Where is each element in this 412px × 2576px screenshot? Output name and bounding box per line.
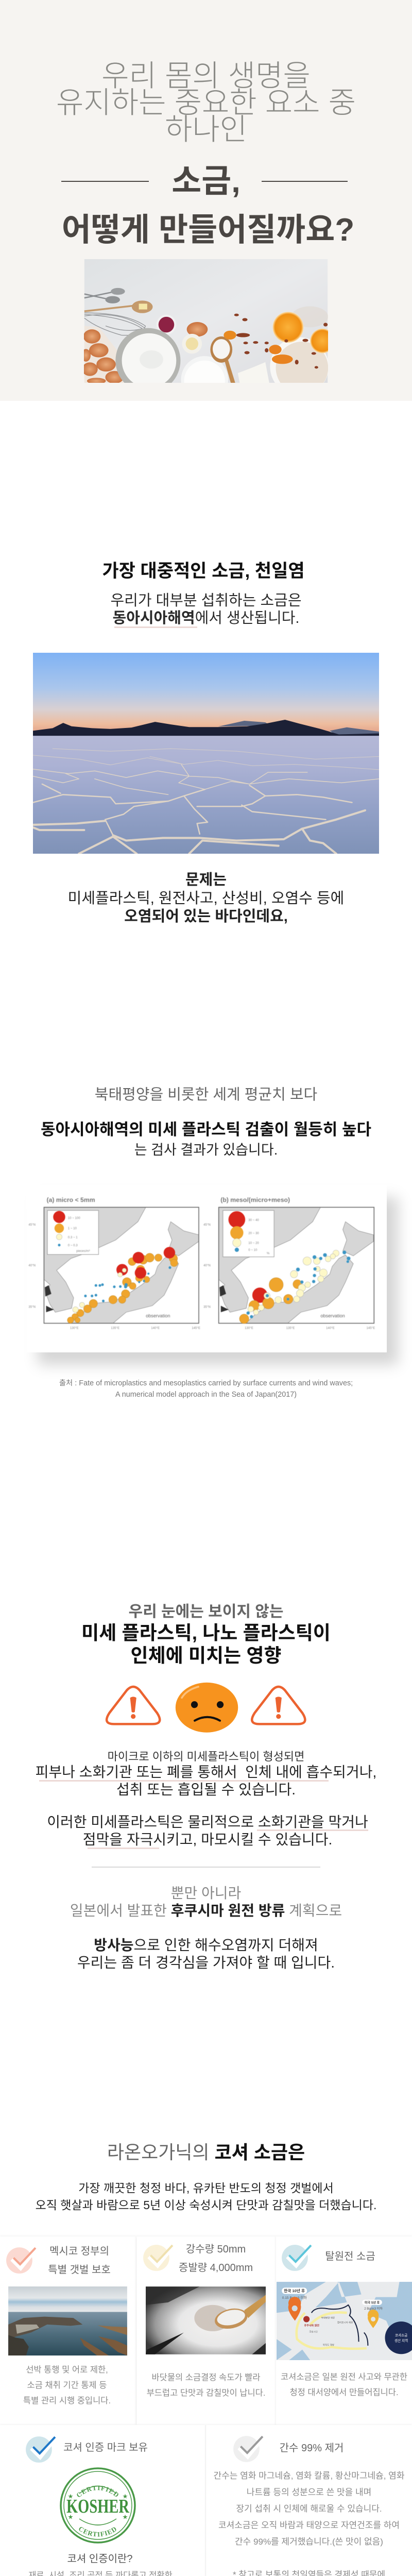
text: radioactivity: 방사능으로 인한 해수오염까지 더해져 우리는 좀 더 경각심을 가져야 할 때 입니다. [77, 1937, 335, 1971]
text: above world average: 북태평양을 비롯한 세계 평균치 보다 [95, 1087, 317, 1103]
map a: 0.3 ~ 1 [68, 1235, 78, 1239]
map b: 0 ~ 10 [248, 1248, 258, 1252]
map: ocean current: 0.15 Bq/m3 이하 [282, 2295, 307, 2300]
photo: baking ingredients [84, 259, 328, 383]
map: ocean current: 2 Bq/m3 이하 [364, 2307, 383, 2311]
map b: 35°N [203, 1305, 211, 1309]
icon: check yellow [143, 2244, 173, 2271]
photo: salt flat at dusk [33, 653, 379, 854]
map b: 135°E [286, 1327, 295, 1330]
map a: (a) micro < 5mm [47, 1196, 95, 1204]
map b: 45°N [203, 1223, 211, 1227]
map a: 130°E [70, 1327, 79, 1330]
map a: 1 ~ 10 [68, 1227, 77, 1230]
map a: 145°E [192, 1327, 200, 1330]
map: ocean current: 미국 5년 후 [365, 2300, 380, 2304]
text: invisible to the eye: 우리 눈에는 보이지 않는 [128, 1603, 283, 1620]
heading: kosher salt: 라온오가닉의 코셔 소금은 [107, 2142, 305, 2163]
stamp: kosher certified: ★ [68, 2494, 73, 2500]
map: ocean current: 코셔소금 [395, 2333, 407, 2337]
title divider left [61, 181, 149, 182]
map a: observation [146, 1313, 170, 1318]
stamp: kosher certified: ★ [123, 2515, 128, 2520]
heading: effects on the human body: 미세 플라스틱, 나노 플라스틱이 인체에 미치는 영향 [81, 1622, 331, 1666]
map a: pieces/m³ [76, 1249, 90, 1253]
card heading: 멕시코 정부의 특별 갯벌 보호 [48, 2246, 111, 2276]
card heading: 탈원전 소금 [325, 2251, 375, 2262]
icon: warning triangle right [252, 1687, 305, 1724]
text: physical blockage: 이러한 미세플라스틱은 물리적으로 소화기관을 막거나 점막을 자극시키고, 마모시킬 수 있습니다. [47, 1814, 368, 1848]
map b: observation [320, 1313, 345, 1318]
panel: card kosher mark [0, 2425, 205, 2576]
map a [28, 1196, 200, 1330]
map: ocean current: 캘리포니아 해류 [337, 2321, 353, 2325]
panel: card rainfall evaporation [136, 2236, 276, 2425]
map a: 35°N [28, 1305, 36, 1309]
text: micro plastics intro: 마이크로 이하의 미세플라스틱이 형성되면 [108, 1750, 304, 1763]
map a: 135°E [111, 1327, 119, 1330]
source note: 출처 : Fate of microplastics and mesoplastics carried by surface currents and wind waves; A numerical model approach in the Sea of Japan(2017) [59, 1379, 353, 1399]
title: salt: 소금, [171, 163, 241, 199]
icons: warnings and sad face [105, 1683, 306, 1733]
map b [203, 1196, 375, 1330]
panel: card no nuclear [276, 2236, 412, 2425]
map b: 145°E [366, 1327, 375, 1330]
photo: rocky sea [8, 2286, 127, 2355]
map: ocean current: 후쿠시마 원전 [304, 2324, 319, 2328]
card text: 바닷물의 소금결정 속도가 빨라 부드럽고 단맛과 감칠맛이 납니다. [147, 2373, 265, 2398]
icon: check grey [233, 2436, 264, 2462]
map b: 10 ~ 20 [248, 1242, 259, 1245]
map a: 140°E [151, 1327, 160, 1330]
map b: % [267, 1251, 270, 1255]
icon: check blue [26, 2436, 56, 2463]
subheading: what is kosher: 코셔 인증이란? [67, 2553, 133, 2565]
map: ocean current: 북적도 해류 [323, 2343, 334, 2347]
map a: 0 ~ 0.3 [68, 1244, 78, 1247]
map: ocean current: 생산 지역 [394, 2338, 408, 2343]
map b: 20 ~ 30 [248, 1231, 259, 1235]
title: intro lines: 우리 몸의 생명을 유지하는 중요한 요소 중 하나인 [56, 59, 356, 146]
stamp: kosher certified: CERTIFIED [77, 2485, 118, 2497]
text: east asia sea: 우리가 대부분 섭취하는 소금은 동아시아해역에서 생산됩니다. [110, 592, 302, 626]
text: test result: 는 검사 결과가 있습니다. [134, 1142, 278, 1158]
map b: 130°E [245, 1327, 253, 1330]
text: kosher salt description: 가장 깨끗한 청정 바다, 유카탄 반도의 청정 갯벌에서 오직 햇살과 바람으로 5년 이상 숙성시켜 단맛과 감칠맛을 더했습니다. [36, 2181, 376, 2212]
panel: card mexico tidal flat [0, 2236, 136, 2425]
map: ocean current: 북태평양 해류 [321, 2316, 335, 2319]
map: ocean current: 한국 10년 후 [284, 2288, 305, 2293]
stamp: kosher certified: ★ [68, 2515, 73, 2520]
map a: 40°N [28, 1264, 36, 1267]
card heading: 코셔 인증 마크 보유 [63, 2442, 148, 2453]
map b: 140°E [326, 1327, 335, 1330]
photo: salt and wooden spoon [146, 2286, 266, 2354]
panel: card bittern removal [206, 2425, 412, 2576]
card heading: 간수 99% 제거 [280, 2443, 344, 2454]
card heading: 강수량 50mm 증발량 4,000mm [179, 2244, 253, 2274]
title divider right [262, 181, 348, 182]
map: ocean current [277, 2282, 412, 2360]
map b: 40°N [203, 1264, 211, 1267]
stamp: kosher certified: ★ [123, 2494, 128, 2500]
icon: check salmon [6, 2247, 36, 2274]
stamp: kosher certified: CERTIFIED [79, 2527, 116, 2537]
text: fukushima: 뿐만 아니라 일본에서 발표한 후쿠시마 원전 방류 계획으로 [70, 1885, 342, 1919]
chart: microplastic maps [26, 1185, 387, 1352]
icon: sad face [176, 1683, 238, 1733]
map b: (b) meso/(micro+meso) [220, 1196, 290, 1204]
map: ocean current: 쿠로시오 [309, 2330, 318, 2333]
text: absorption: 피부나 소화기관 또는 폐를 통해서 인체 내에 흡수되거나, 섭취 또는 흡입될 수 있습니다. [36, 1764, 376, 1798]
card text: 코셔소금은 일본 원전 사고와 무관한 청정 대서양에서 만들어집니다. [281, 2372, 407, 2397]
title: how is it made: 어떻게 만들어질까요? [62, 212, 354, 248]
stamp: kosher certified [60, 2467, 136, 2544]
text: the problem: 문제는 미세플라스틱, 원전사고, 산성비, 오염수 등에 오염되어 있는 바다인데요, [68, 872, 344, 925]
icon: check cyan [282, 2244, 312, 2271]
map a: 10 ~ 100 [68, 1216, 80, 1220]
icon: warning triangle left [107, 1687, 160, 1724]
map b: 30 ~ 40 [248, 1218, 259, 1222]
heading: most common salt: 가장 대중적인 소금, 천일염 [102, 561, 305, 581]
text: east asia detection highest: 동아시아해역의 미세 플라스틱 검출이 월등히 높다 [41, 1121, 371, 1139]
map a: 45°N [28, 1223, 36, 1227]
panel: hero background [0, 0, 412, 401]
card text: 선박 통행 및 어로 제한, 소금 채취 기간 통제 등 특별 관리 시행 중입니다. [23, 2365, 111, 2405]
